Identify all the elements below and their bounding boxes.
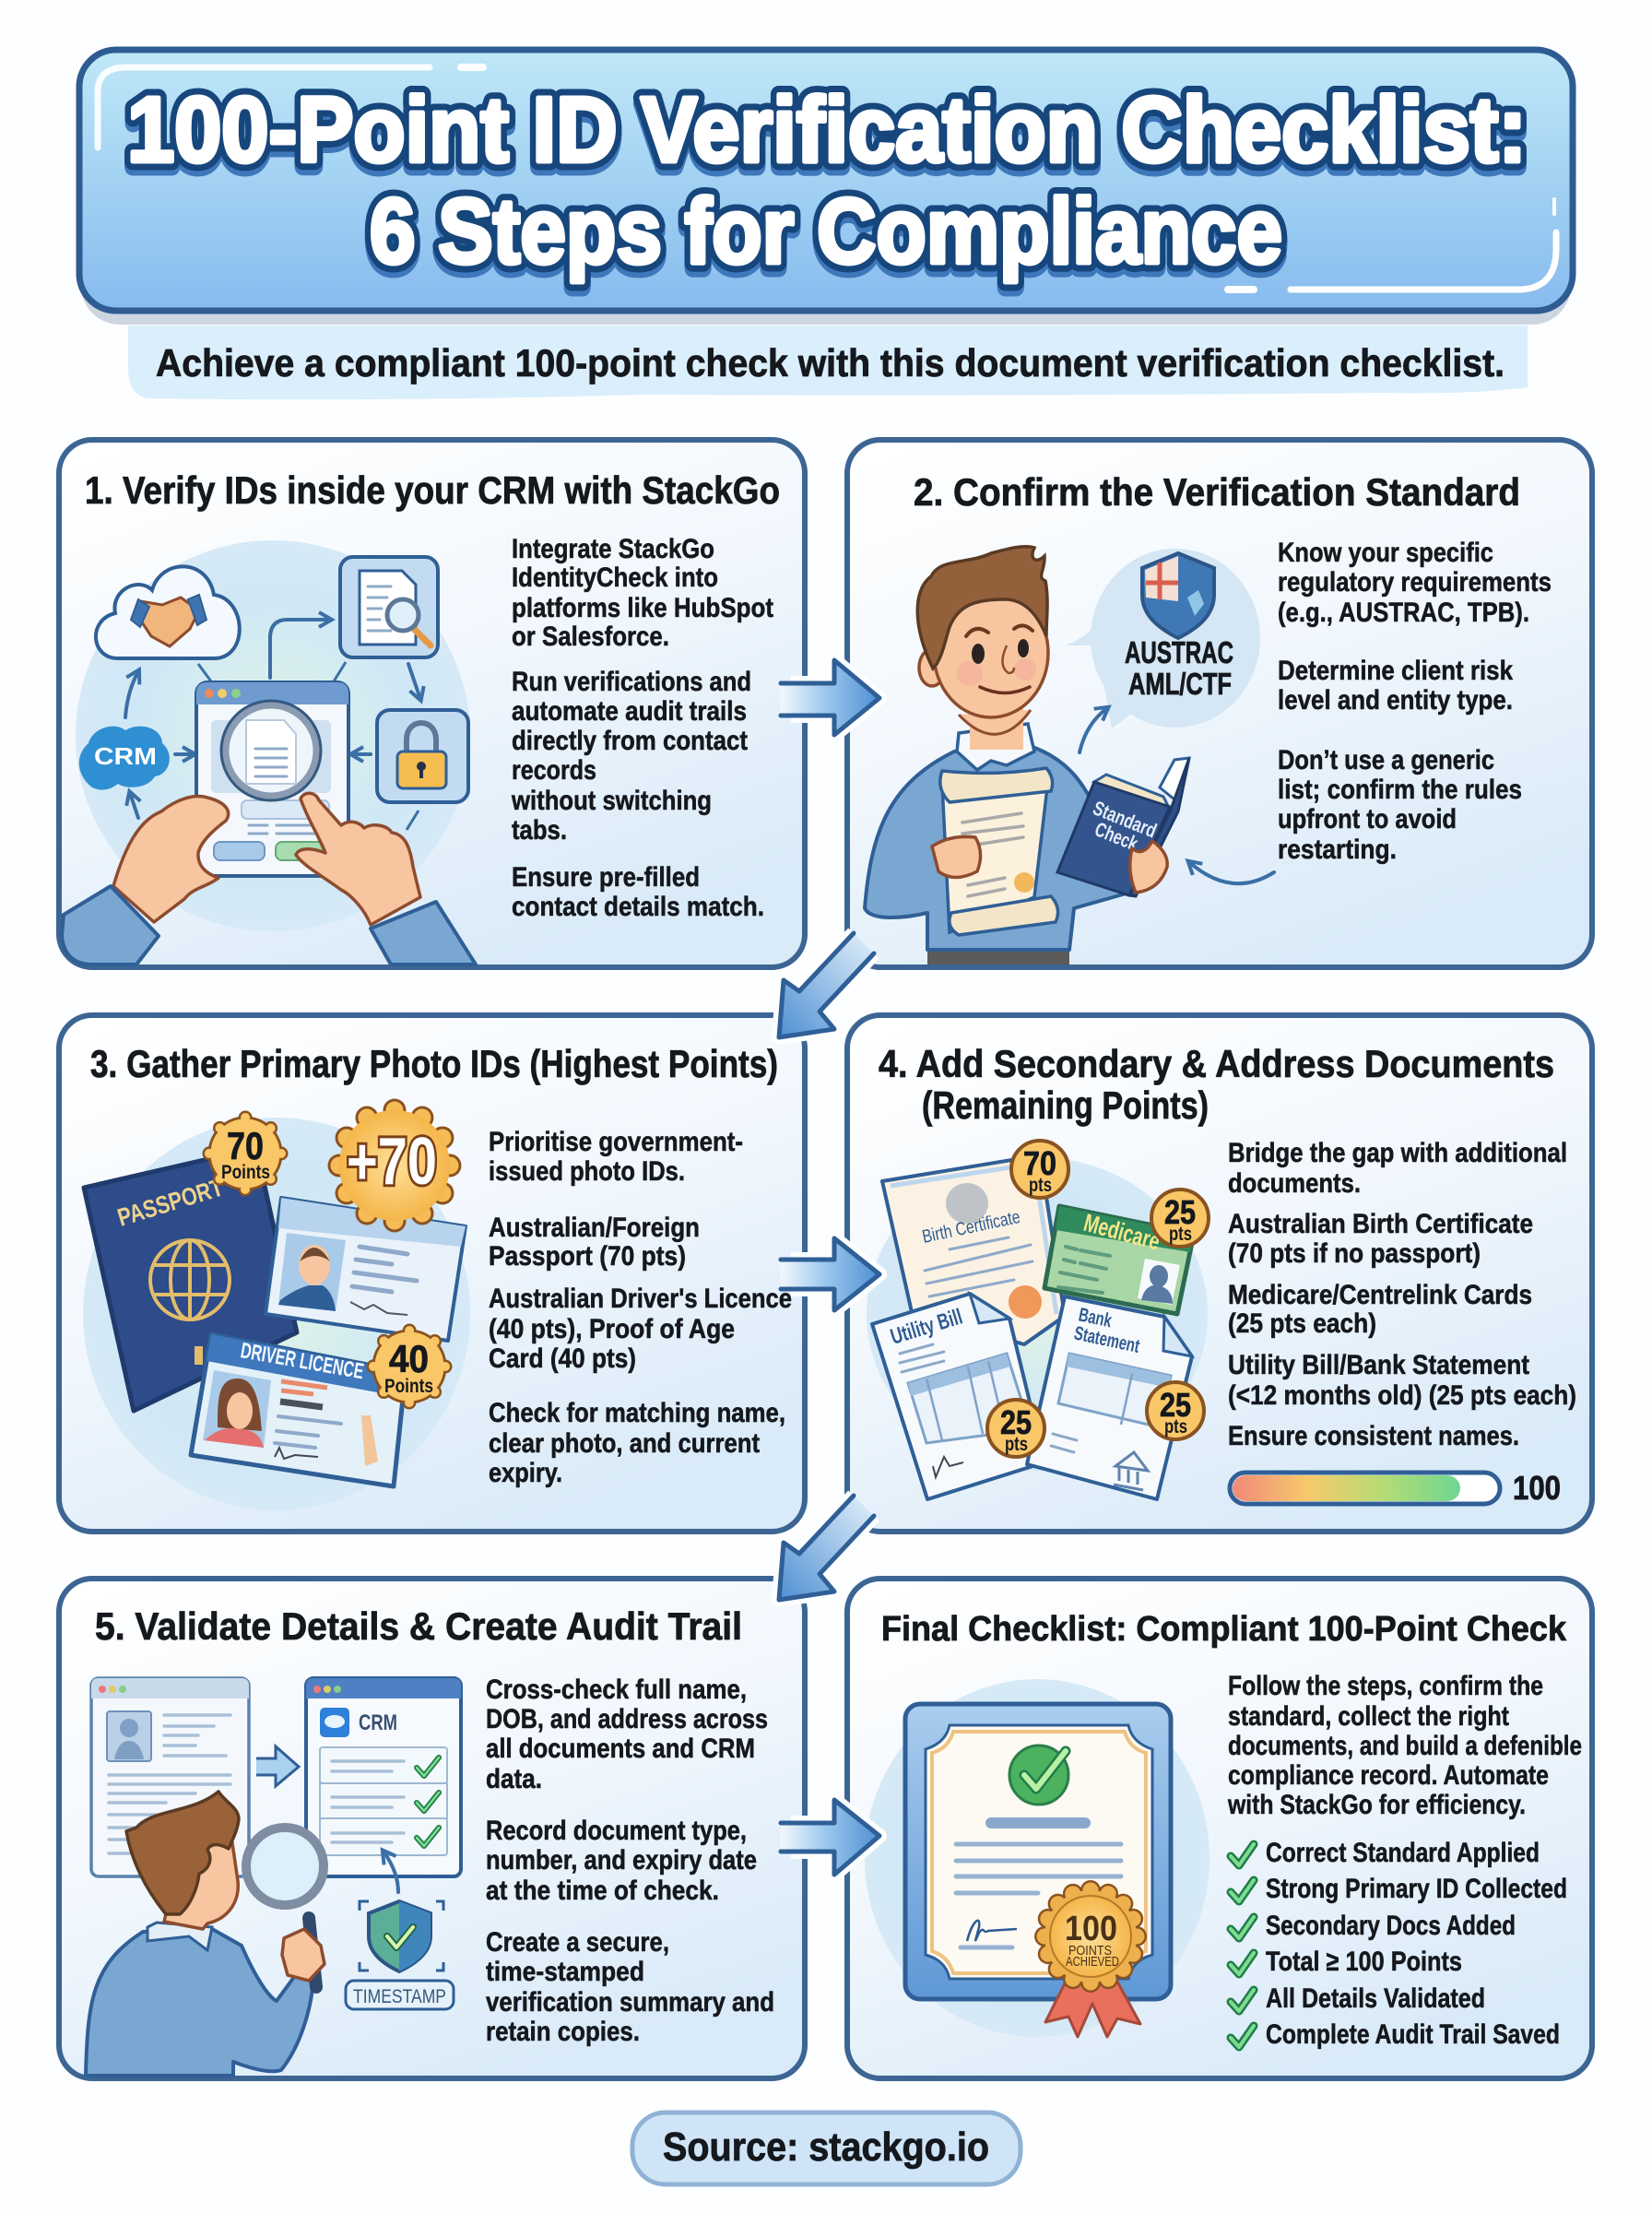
book: standard check: Check [1092, 817, 1142, 856]
driver licence: DRIVER LICENCE [239, 1338, 366, 1384]
icon: CRM cloud [79, 727, 170, 790]
text: step 4: Utility Bill/Bank Statement [1228, 1350, 1529, 1380]
text: step 5: Record document type, [486, 1816, 747, 1846]
illustration: CRM workflow [62, 540, 476, 964]
badge: 70 points: 70 [227, 1124, 264, 1167]
checklist: Total ≥ 100 Points [1266, 1947, 1462, 1977]
medal: 100 points [1044, 1890, 1140, 2037]
text: step 4: (25 pts each) [1228, 1308, 1376, 1339]
medal: 100 points: 100 [1065, 1910, 1117, 1948]
panel: final checklist [847, 1579, 1592, 2078]
text: step 5: Create a secure, [486, 1927, 669, 1958]
progress bar: 100 [1513, 1469, 1561, 1507]
text: step 4 [1228, 1138, 1576, 1451]
medal: 100 points: ACHIEVED [1066, 1954, 1119, 1970]
text: step 1: contact details match. [512, 892, 764, 922]
text: step 5: data. [486, 1764, 542, 1794]
icon: timestamp shield [360, 1901, 443, 1971]
badge: 25 pts medicare [1151, 1189, 1209, 1247]
text: final summary: Follow the steps, confirm the [1228, 1671, 1543, 1701]
heading: step 3: 3. Gather Primary Photo IDs (Highest Points) [90, 1042, 778, 1085]
driver licence [191, 1334, 406, 1486]
icon: CRM cloud: CRM [94, 742, 157, 770]
illustration: secondary documents [867, 1141, 1209, 1499]
text: step 4: Medicare/Centrelink Cards [1228, 1280, 1532, 1310]
speech bubble AUSTRAC: AUSTRAC [1125, 635, 1233, 669]
person with magnifier [86, 1792, 324, 2076]
title banner: 6 Steps for Compliance [370, 185, 1282, 289]
badge: 70 pts: pts [1029, 1175, 1052, 1196]
panel: step 3 [59, 1015, 805, 1532]
text: step 5: retain copies. [486, 2017, 640, 2047]
medicare card [1044, 1206, 1194, 1314]
arrow: step 4 to step 5 [779, 1496, 874, 1600]
text: step 1: directly from contact [512, 726, 748, 756]
badge: 70 points [209, 1118, 281, 1189]
checklist: All Details Validated [1266, 1983, 1485, 2014]
icon: padlock [377, 710, 468, 802]
text: final summary [1227, 1671, 1582, 1820]
text: step 2: restarting. [1278, 834, 1397, 865]
text: step 2: Determine client risk [1278, 656, 1513, 686]
text: step 5: at the time of check. [486, 1876, 719, 1906]
title banner: 100-Point ID Verification Checklist: [127, 78, 1527, 182]
text: step 3: Prioritise government- [489, 1127, 743, 1157]
text: step 1: Ensure pre-filled [512, 862, 700, 893]
text: step 4: Bridge the gap with additional [1228, 1138, 1567, 1168]
text: step 3: Passport (70 pts) [489, 1241, 686, 1272]
checklist: Strong Primary ID Collected [1266, 1874, 1567, 1904]
CRM window [306, 1678, 461, 1876]
checklist: Secondary Docs Added [1266, 1911, 1516, 1941]
text: step 4: documents. [1228, 1168, 1361, 1199]
text: step 2: upfront to avoid [1278, 804, 1457, 834]
text: step 3: Card (40 pts) [489, 1343, 636, 1374]
bank statement [1027, 1296, 1192, 1499]
illustration: photo IDs [83, 1110, 470, 1510]
source pill: Source: stackgo.io [663, 2124, 989, 2170]
illustration: validation [86, 1678, 461, 2076]
title banner: 6 Steps for Compliance [370, 180, 1282, 283]
badge: 40 points [373, 1331, 445, 1402]
ID card [266, 1198, 466, 1341]
icon: cloud handshake [96, 566, 240, 658]
text: step 1: records [512, 755, 596, 786]
speech bubble AUSTRAC [1066, 549, 1260, 728]
utility bill: Utility Bill [888, 1305, 965, 1350]
progress bar [1230, 1469, 1561, 1507]
badge: +70 [339, 1110, 450, 1221]
label: timestamp: TIMESTAMP [353, 1986, 446, 2007]
title banner: 100-Point ID Verification Checklist: [127, 78, 1527, 182]
icon: document search [340, 557, 438, 657]
text: step 3: Australian Driver's Licence [489, 1284, 792, 1314]
text: step 5: time-stamped [486, 1957, 644, 1987]
passport [84, 1148, 297, 1411]
title banner: 100-Point ID Verification Checklist: [127, 84, 1527, 187]
device screen [196, 682, 348, 876]
text: step 2 [1278, 538, 1552, 865]
text: step 1: IdentityCheck into [512, 562, 718, 593]
text: step 1: automate audit trails [512, 696, 747, 727]
scroll [932, 768, 1058, 935]
book: standard check [1057, 758, 1189, 896]
text: step 1: without switching [511, 786, 712, 816]
text: step 4: Australian Birth Certificate [1228, 1209, 1533, 1239]
heading: final checklist: Final Checklist: Compliant 100-Point Check [881, 1610, 1567, 1649]
bank statement: Bank [1077, 1304, 1114, 1331]
text: step 3: Australian/Foreign [489, 1213, 700, 1243]
utility bill [872, 1294, 1044, 1499]
text: step 2: Don’t use a generic [1278, 745, 1494, 775]
text: step 3: (40 pts), Proof of Age [489, 1314, 735, 1344]
badge: 40 points: Points [384, 1376, 433, 1397]
text: final summary: standard, collect the right [1228, 1701, 1509, 1732]
checklist: Correct Standard Applied [1266, 1838, 1540, 1868]
badge: 25 pts bank: pts [1164, 1416, 1187, 1438]
text: step 3: clear photo, and current [489, 1428, 760, 1459]
text: step 2: regulatory requirements [1278, 567, 1552, 598]
medal: 100 points: POINTS [1068, 1943, 1112, 1959]
heading: step 4: 4. Add Secondary & Address Documents [879, 1042, 1554, 1085]
badge: 70 points: Points [221, 1162, 270, 1183]
heading: step 1: 1. Verify IDs inside your CRM with StackGo [85, 468, 780, 512]
badge: 70 pts [1011, 1141, 1068, 1198]
text: step 2: (e.g., AUSTRAC, TPB). [1278, 598, 1529, 628]
illustration: certificate [865, 1679, 1210, 2037]
text: step 2: level and entity type. [1278, 685, 1513, 716]
subtitle [128, 325, 1528, 399]
panel: step 5 [59, 1579, 805, 2078]
arrow: step 1 to step 2 [781, 660, 879, 735]
text: step 3 [489, 1127, 792, 1488]
text: step 2: Know your specific [1278, 538, 1493, 568]
checklist [1231, 1838, 1567, 2050]
text: step 5 [486, 1675, 774, 2047]
icon: magnifier over document [221, 701, 321, 800]
text: step 5: number, and expiry date [486, 1845, 757, 1876]
badge: 25 pts medicare: 25 [1164, 1193, 1196, 1231]
heading: step 2: 2. Confirm the Verification Standard [914, 470, 1520, 514]
heading: step 4: (Remaining Points) [922, 1083, 1209, 1127]
illustration: person with standard [865, 547, 1274, 964]
arrow: to CRM [256, 1746, 299, 1786]
text: step 1 [511, 534, 773, 922]
icon: green check [1009, 1746, 1068, 1805]
text: step 1: tabs. [512, 815, 567, 846]
badge: 25 pts medicare: pts [1169, 1224, 1192, 1245]
badge: 25 pts utility [987, 1400, 1044, 1457]
badge: 70 pts: 70 [1023, 1144, 1056, 1182]
label: timestamp [346, 1981, 454, 2009]
panel: step 2 [847, 440, 1592, 967]
badge: 25 pts utility: 25 [1000, 1403, 1032, 1441]
text: step 4: Ensure consistent names. [1228, 1421, 1519, 1451]
text: step 5: verification summary and [486, 1987, 774, 2018]
hands holding device [62, 793, 476, 964]
CRM window: CRM [359, 1710, 397, 1735]
book: standard check: Standard [1090, 796, 1160, 843]
text: final summary: with StackGo for efficiency. [1227, 1790, 1526, 1820]
arrow: step 5 to final [781, 1800, 879, 1875]
badge: 40 points: 40 [389, 1337, 429, 1380]
text: step 4: (70 pts if no passport) [1228, 1238, 1481, 1269]
badge: 25 pts bank: 25 [1160, 1386, 1191, 1424]
title banner: 6 Steps for Compliance [370, 180, 1282, 283]
text: step 1: Run verifications and [512, 667, 751, 697]
title banner [79, 50, 1573, 325]
speech bubble AUSTRAC: AML/CTF [1128, 667, 1232, 701]
badge: 25 pts utility: pts [1005, 1434, 1028, 1455]
arrow: step 2 to step 3 [779, 933, 874, 1037]
heading: step 4 [879, 1042, 1554, 1127]
birth certificate [882, 1155, 1065, 1344]
source pill [632, 2112, 1021, 2184]
text: final summary: compliance record. Automate [1228, 1760, 1549, 1791]
badge: 25 pts bank [1147, 1382, 1204, 1439]
panel: step 1 [59, 440, 805, 967]
text: step 5: Cross-check full name, [486, 1675, 747, 1705]
text: step 3: expiry. [489, 1458, 562, 1488]
birth certificate: Birth Certificate [920, 1207, 1022, 1248]
document window [91, 1678, 249, 1876]
subtitle: Achieve a compliant 100-point check with this document verification checklist. [156, 341, 1504, 385]
text: step 5: DOB, and address across [486, 1704, 768, 1734]
passport: PASSPORT [114, 1173, 227, 1232]
panel: step 4 [847, 1015, 1592, 1532]
heading: step 5: 5. Validate Details & Create Audit Trail [95, 1604, 742, 1648]
text: step 4: (<12 months old) (25 pts each) [1228, 1380, 1576, 1411]
text: step 2: list; confirm the rules [1278, 775, 1522, 805]
arrow: step 3 to step 4 [781, 1238, 879, 1310]
text: step 1: Integrate StackGo [512, 534, 714, 564]
badge: +70: +70 [347, 1125, 437, 1199]
text: step 3: Check for matching name, [489, 1398, 785, 1428]
medicare card: Medicare [1080, 1209, 1162, 1256]
checklist: Complete Audit Trail Saved [1266, 2019, 1560, 2050]
person [865, 547, 1129, 950]
text: step 3: issued photo IDs. [489, 1156, 685, 1187]
bank statement: Statement [1072, 1322, 1141, 1357]
text: step 5: all documents and CRM [486, 1734, 755, 1764]
text: step 1: or Salesforce. [512, 621, 669, 652]
text: step 1: platforms like HubSpot [512, 593, 773, 623]
